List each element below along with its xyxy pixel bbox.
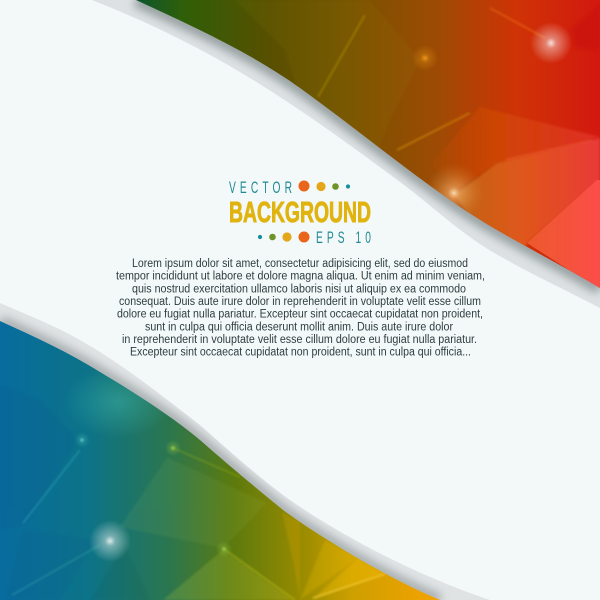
facet: lower green polygon — [163, 550, 293, 600]
facet: golden fan — [301, 541, 354, 598]
body text block: Excepteur sint occaecat cupidatat non proident, sunt in culpa qui officia... — [130, 347, 471, 359]
streak: teal diagonal — [23, 450, 80, 523]
heading: EPS 10: EPS 10 — [316, 229, 371, 247]
body text block: sunt in culpa qui officia deserunt mollit anim. Duis aute irure dolor — [145, 321, 453, 333]
streak: light red — [505, 140, 592, 160]
streak: lower teal — [12, 545, 100, 595]
dots: top row — [298, 180, 350, 192]
facet: amber polygon — [282, 513, 300, 591]
glow: small teal — [76, 434, 88, 446]
body text block: dolore eu fugiat nulla pariatur. Excepteur sint occaecat cupidatat non proident, — [117, 309, 483, 321]
glow: white teal — [90, 522, 130, 560]
facet: olive polygon — [235, 0, 420, 160]
heading: VECTOR: VECTOR — [229, 179, 292, 197]
body text block — [116, 258, 485, 359]
body text block: tempor incididunt ut labore et dolore magna aliqua. Ut enim ad minim veniam, — [116, 271, 485, 283]
haze: teal — [76, 376, 160, 428]
facet: lower left green polygon — [90, 545, 150, 600]
glow: orange — [414, 48, 435, 68]
facet: orange polygon — [441, 108, 598, 181]
body text block: in reprehenderit in voluptate velit esse cillum dolore eu fugiat nulla pariatur. — [122, 334, 477, 346]
facet: bright yellow fan — [315, 559, 381, 598]
body text block: Lorem ipsum dolor sit amet, consectetur adipisicing elit, sed do eiusmod — [132, 258, 468, 270]
heading: BACKGROUND: BACKGROUND — [229, 197, 371, 229]
panel: top right polygon colour field — [130, 0, 600, 295]
panel: bottom left polygon colour field — [0, 315, 445, 600]
top right folded band shadow — [80, 0, 600, 320]
facet: bright red polygon — [527, 180, 600, 290]
glow: white pink — [532, 24, 570, 62]
facet: deep lower polygon — [5, 530, 95, 600]
body text block: quis nostrud exercitation ullamco laboris nisi ut aliquip ex ea commodo — [132, 283, 466, 295]
streak: yellow — [318, 15, 365, 97]
streak: yellow — [313, 574, 385, 598]
dots: bottom row — [258, 232, 310, 242]
facet: dark blue polygon — [0, 385, 78, 530]
facet: light green polygon — [122, 458, 263, 544]
glow: green upper — [166, 442, 180, 454]
streak: orange — [490, 8, 545, 38]
streak: teal horizontal — [20, 371, 100, 373]
bottom left folded band shadow — [0, 295, 500, 600]
streak: green — [173, 448, 240, 477]
body text block: consequat. Duis aute irure dolor in reprehenderit in voluptate velit esse cillum — [119, 296, 481, 308]
facet: upper right red polygon — [573, 26, 581, 45]
glow: peach — [430, 168, 477, 212]
facet: red orange polygon — [458, 138, 600, 246]
streak: amber — [397, 113, 470, 150]
streak: lime — [224, 549, 295, 600]
glow: green lower — [218, 543, 230, 554]
title block — [229, 179, 371, 247]
